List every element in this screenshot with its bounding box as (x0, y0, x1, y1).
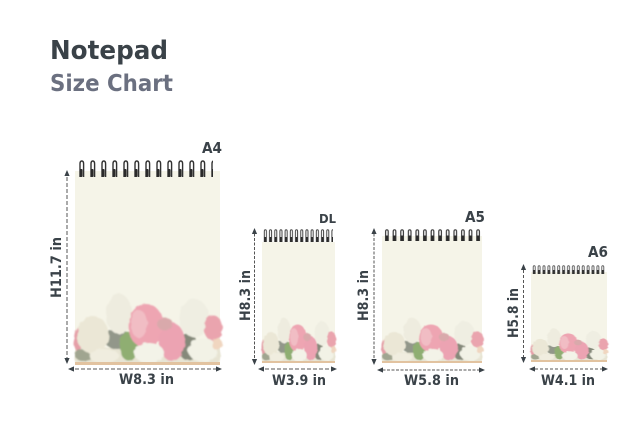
height label A6: H5.8 in (506, 288, 522, 338)
height arrow A5 (373, 229, 375, 364)
label A6: A6 (588, 243, 608, 261)
width label DL: W3.9 in (272, 373, 326, 389)
width label A6: W4.1 in (541, 373, 595, 389)
title: Notepad (50, 36, 168, 66)
height arrow A4 (66, 171, 68, 363)
width arrow A5 (378, 369, 484, 371)
height arrow DL (254, 229, 256, 364)
width arrow A6 (530, 368, 607, 370)
subtitle: Size Chart (50, 71, 173, 97)
notepad A4 (49, 139, 222, 388)
label DL: DL (319, 211, 336, 226)
height label A4: H11.7 in (49, 237, 65, 298)
height label DL: H8.3 in (238, 270, 254, 321)
width label A4: W8.3 in (119, 372, 174, 388)
notepad A6 (506, 243, 608, 389)
label A5: A5 (465, 208, 485, 226)
width arrow A4 (69, 368, 221, 370)
height arrow A6 (522, 265, 524, 362)
width label A5: W5.8 in (404, 373, 459, 389)
notepad DL (238, 211, 336, 389)
title (50, 36, 173, 97)
height label A5: H8.3 in (356, 270, 372, 321)
notepad A5 (356, 208, 485, 389)
label A4: A4 (202, 139, 222, 157)
width arrow DL (259, 368, 336, 370)
